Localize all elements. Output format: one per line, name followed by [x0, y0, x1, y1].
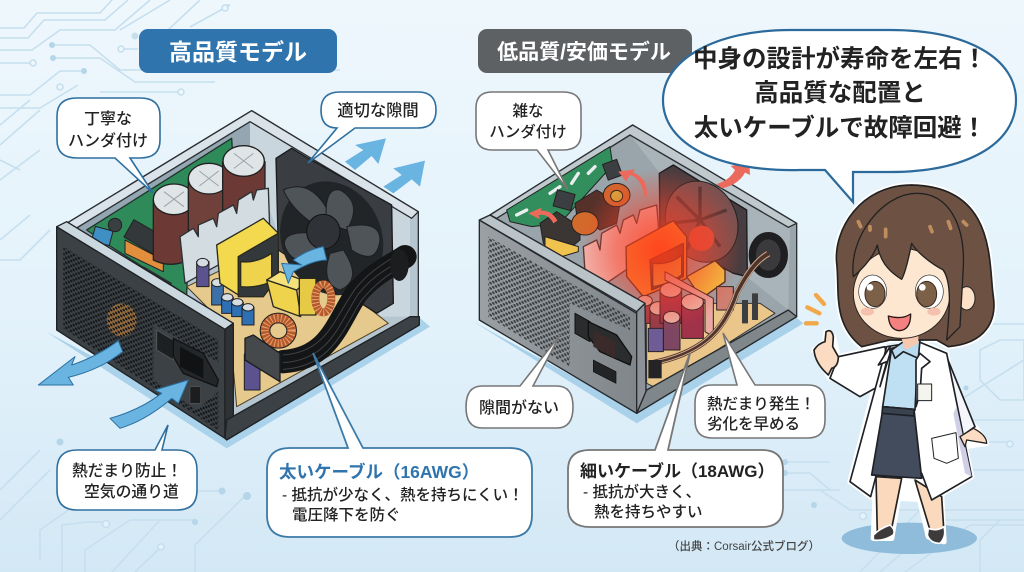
- blush right: [927, 308, 941, 316]
- ear: [958, 287, 975, 310]
- heading: low-quality model: [478, 29, 692, 73]
- beige board: [647, 303, 775, 388]
- callout: proper spacing: [308, 92, 436, 163]
- callout: careful soldering: ハンダ付け: [68, 131, 148, 150]
- arrow: hot air out: [38, 341, 123, 385]
- callout: thick cable 16AWG: - 抵抗が少なく、熱を持ちにくい！: [282, 485, 524, 504]
- callout: heat build-up: 劣化を早める: [707, 415, 800, 433]
- blush: [861, 308, 874, 316]
- shoes: [873, 525, 945, 543]
- source credit: （出典：Corsair公式ブログ）: [668, 539, 820, 553]
- cable connector block: [245, 335, 280, 382]
- callout: thin cable 18AWG: [568, 353, 783, 527]
- callout: thick cable 16AWG: 太いケーブル（16AWG）: [279, 462, 479, 482]
- callout: sloppy soldering: [476, 92, 581, 190]
- name badge: [918, 384, 932, 401]
- red arrow 2: [618, 169, 647, 198]
- front face with vents: [479, 215, 797, 413]
- red arrow 3: [528, 208, 557, 223]
- heading: high-quality model: [139, 29, 337, 73]
- thumbs-up hand: [814, 331, 838, 375]
- heat sink: [583, 205, 660, 297]
- top rim: [490, 125, 797, 227]
- white sticker outline: [814, 185, 994, 542]
- interior walls: [490, 125, 797, 413]
- large capacitors: [153, 146, 265, 264]
- callout: thick cable 16AWG: [267, 353, 532, 537]
- heat sink: [180, 188, 270, 283]
- AC socket: [173, 338, 218, 403]
- speech bubble main message: [663, 30, 1016, 202]
- callout: no gaps: 隙間がない: [479, 398, 559, 417]
- red heat glow: [578, 168, 742, 332]
- callout: prevent heat build-up: 熱だまり防止！: [72, 462, 182, 480]
- shirt: [883, 342, 918, 410]
- thin brown cable with grommet: [648, 236, 784, 378]
- callout: thick cable 16AWG: 電圧降下を防ぐ: [292, 506, 401, 524]
- callout: thin cable 18AWG: - 抵抗が大きく、: [583, 482, 701, 501]
- interior walls: [67, 111, 418, 433]
- callout: no gaps: [466, 335, 573, 428]
- capacitor group: [638, 272, 733, 352]
- fringe: [853, 193, 963, 340]
- callout: heat build-up: 熱だまり発生！: [707, 395, 815, 413]
- callout: proper spacing: 適切な隙間: [337, 102, 419, 120]
- heading: low-quality model: 低品質/安価モデル: [497, 40, 671, 64]
- neck: [900, 333, 918, 350]
- hair back: [836, 185, 994, 347]
- callout: sloppy soldering: 雑な: [512, 102, 544, 120]
- green PCB: [507, 147, 630, 257]
- power switch: [575, 313, 590, 342]
- small capacitors: [197, 258, 260, 390]
- arrow: cool air in: [110, 380, 188, 428]
- speech bubble main message: 中身の設計が寿命を左右！: [693, 44, 987, 73]
- floor shadow: [46, 317, 430, 448]
- mouth: [888, 314, 911, 331]
- callout: prevent heat build-up: [57, 425, 197, 510]
- callout: thin cable 18AWG: 細いケーブル（18AWG）: [580, 461, 774, 481]
- heading: high-quality model: 高品質モデル: [169, 39, 307, 65]
- speech bubble main message: 太いケーブルで故障回避！: [694, 113, 986, 142]
- speech bubble main message: 高品質な配置と: [754, 79, 926, 107]
- floor shadow: [473, 317, 803, 423]
- callout: sloppy soldering: ハンダ付け: [489, 122, 567, 141]
- right eye: [915, 275, 943, 308]
- green PCB: [87, 138, 233, 295]
- arrow: exhaust 2: [383, 161, 425, 193]
- lab coat: [830, 340, 975, 500]
- fan: [262, 148, 402, 313]
- beige circuit board: [187, 240, 388, 407]
- pocket: [932, 433, 958, 463]
- legs: [876, 477, 944, 533]
- callout: prevent heat build-up: 空気の通り道: [84, 483, 179, 501]
- power switch: [157, 330, 173, 360]
- right hand: [960, 428, 987, 447]
- thick cable: [283, 252, 407, 369]
- fan: [652, 165, 751, 277]
- arrow: exhaust 1: [345, 138, 386, 170]
- collar: [892, 340, 920, 358]
- copper toroids: [265, 284, 331, 343]
- orange transformer: [626, 221, 725, 298]
- left PSU: high-quality model: [38, 111, 430, 448]
- callout: thin cable 18AWG: 熱を持ちやすい: [594, 503, 703, 521]
- callout: careful soldering: [57, 98, 160, 193]
- skirt: [872, 407, 922, 478]
- sparkle marks: [806, 295, 824, 323]
- small parts right side: [745, 293, 755, 323]
- girl character in lab coat: [806, 185, 994, 554]
- callout: careful soldering: 丁寧な: [84, 110, 132, 128]
- face: [853, 248, 950, 338]
- yellow transformer: [217, 218, 316, 317]
- top rim: [67, 111, 418, 230]
- red arrow 1: [717, 163, 750, 188]
- AC socket: [588, 322, 632, 383]
- arrow: internal airflow: [282, 247, 327, 283]
- cable grommet: [390, 249, 409, 281]
- left eye: [859, 275, 887, 308]
- front face with vents: [57, 222, 419, 440]
- ground shadow: [842, 523, 977, 554]
- callout: heat build-up: [695, 333, 825, 438]
- hair highlights: [858, 222, 967, 237]
- right PSU: low-quality model: [473, 125, 803, 423]
